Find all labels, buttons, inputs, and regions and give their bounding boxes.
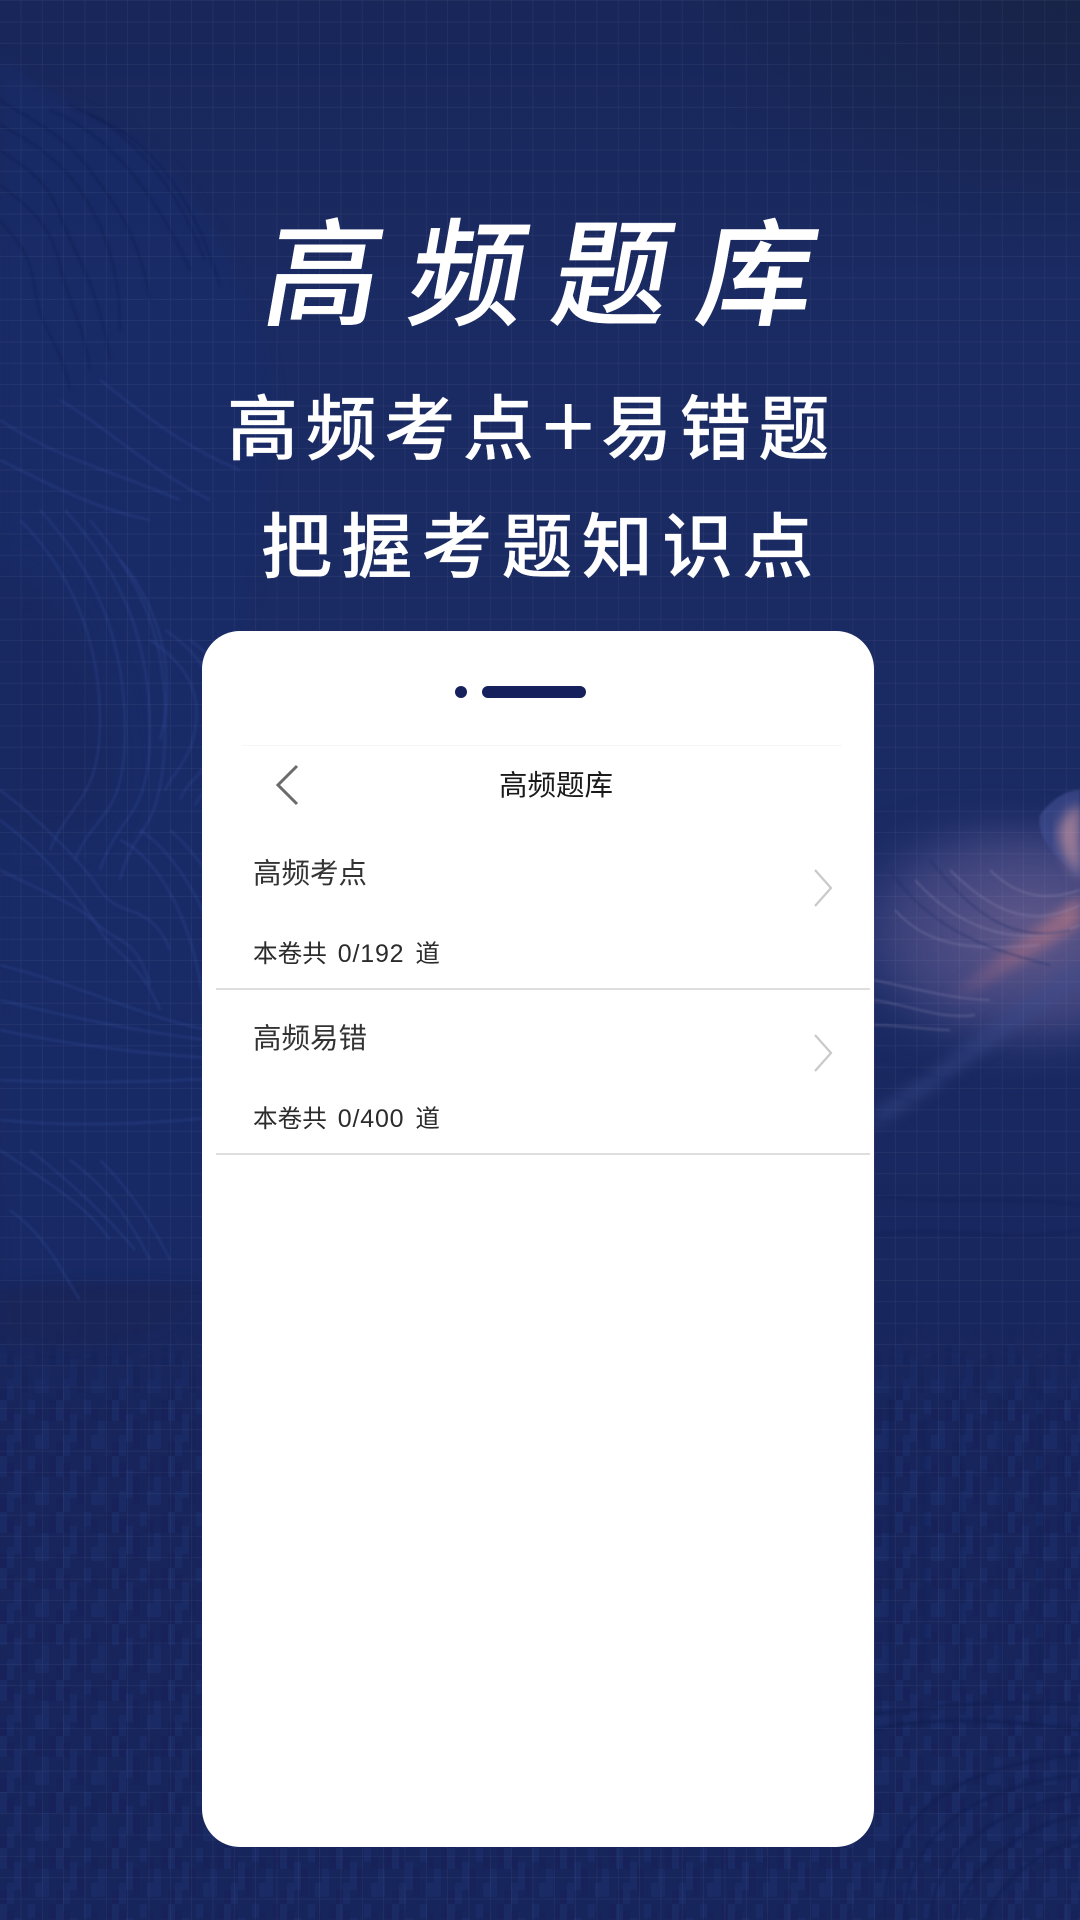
list item: high frequency mistakes — [253, 1023, 832, 1133]
item progress: 本卷共 0/192 道 — [253, 940, 440, 968]
right glowing light streak — [795, 790, 1080, 1130]
left lighter textured mass — [0, 55, 273, 1280]
lower mosaic texture — [0, 1404, 1080, 1914]
bottom right ripple contours — [870, 1703, 1080, 1920]
screen heading: 高频题库 — [499, 770, 613, 802]
left contour lines — [0, 100, 220, 390]
list divider — [216, 988, 870, 990]
panel: phone screen card — [202, 631, 874, 1847]
title: 高频题库 — [255, 211, 856, 341]
icon: item chevron — [814, 1034, 832, 1072]
icon: item chevron — [814, 869, 832, 907]
list item: high frequency points — [253, 858, 832, 968]
list divider — [216, 1153, 870, 1155]
faint header line — [242, 745, 842, 746]
item title: 高频考点 — [253, 858, 367, 890]
subtitle line one: 高频考点+易错题 — [227, 375, 837, 477]
item progress: 本卷共 0/400 道 — [253, 1105, 440, 1133]
phone notch: dot and speaker — [455, 686, 586, 698]
item title: 高频易错 — [253, 1023, 367, 1055]
subtitle line two: 把握考题知识点 — [261, 509, 822, 588]
icon: back chevron — [276, 765, 298, 805]
